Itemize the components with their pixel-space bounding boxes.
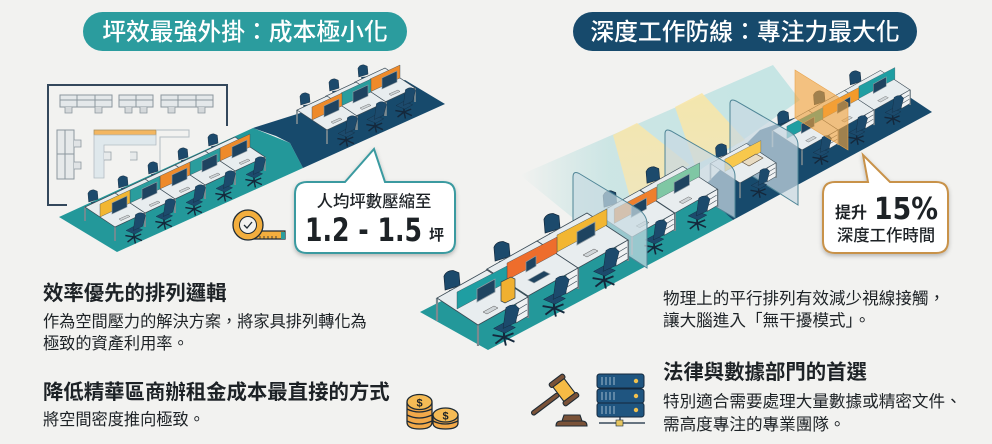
right floor: teal and navy zones bbox=[420, 65, 932, 350]
right text: legal and data teams bbox=[663, 361, 962, 434]
left text: efficiency logic: 效率優先的排列邏輯 bbox=[43, 282, 227, 305]
icon: coin stacks: $ bbox=[416, 398, 423, 410]
right heading pill: 深度工作防線：專注力最大化 bbox=[590, 19, 900, 46]
right workstations: middle section bbox=[597, 163, 718, 255]
callout: per-person area bbox=[295, 149, 455, 253]
left heading pill bbox=[83, 12, 407, 51]
icon: coin stacks: $ bbox=[442, 410, 449, 422]
callout: deep work time: 15% bbox=[874, 192, 938, 227]
callout: per-person area: 人均坪數壓縮至 bbox=[317, 193, 431, 211]
left near workstation row bbox=[85, 134, 266, 243]
icon: tape measure bbox=[233, 210, 285, 240]
orange focus divider bbox=[795, 70, 848, 150]
icon: coin stacks bbox=[407, 394, 458, 429]
right text: legal and data teams: 需高度專注的專業團隊。 bbox=[663, 415, 846, 434]
left text: efficiency logic bbox=[43, 282, 367, 353]
left text: lowering rent cost: 將空間密度推向極致。 bbox=[43, 411, 205, 429]
left floor: teal and navy zones bbox=[59, 80, 445, 252]
callout: per-person area: 1.2 - 1.5 bbox=[305, 211, 422, 249]
glass panel 3 bbox=[730, 100, 798, 205]
callout: per-person area: 坪 bbox=[429, 227, 444, 244]
floor plan sketch bbox=[48, 85, 227, 205]
right text: reduced eye contact bbox=[663, 289, 945, 330]
callout: deep work time: 提升 bbox=[835, 204, 867, 222]
right text: legal and data teams: 法律與數據部門的首選 bbox=[663, 361, 868, 384]
glass panel 2 bbox=[665, 130, 735, 218]
callout: deep work time: 深度工作時間 bbox=[837, 226, 935, 245]
left text: lowering rent cost: 降低精華區商辦租金成本最直接的方式 bbox=[43, 380, 390, 404]
left far workstation row bbox=[297, 65, 416, 146]
icon: data server bbox=[597, 374, 645, 426]
left text: efficiency logic: 極致的資產利用率。 bbox=[43, 335, 189, 353]
right heading pill bbox=[573, 12, 917, 51]
workstation behind glass 3 bbox=[710, 141, 776, 198]
right text: reduced eye contact: 物理上的平行排列有效減少視線接觸， bbox=[663, 289, 945, 308]
left text: efficiency logic: 作為空間壓力的解決方案，將家具排列轉化為 bbox=[43, 313, 367, 331]
left text: lowering rent cost bbox=[43, 380, 390, 429]
glass panel 1 bbox=[573, 173, 647, 268]
right text: reduced eye contact: 讓大腦進入「無干擾模式」。 bbox=[663, 310, 870, 330]
left heading pill: 坪效最強外掛：成本極小化 bbox=[102, 19, 388, 46]
callout: deep work time bbox=[823, 155, 948, 253]
right text: legal and data teams: 特別適合需要處理大量數據或精密文件、 bbox=[663, 392, 962, 411]
right workstations: far section bbox=[772, 68, 910, 165]
icon: gavel bbox=[524, 373, 587, 426]
right workstations: near section bbox=[437, 209, 628, 346]
